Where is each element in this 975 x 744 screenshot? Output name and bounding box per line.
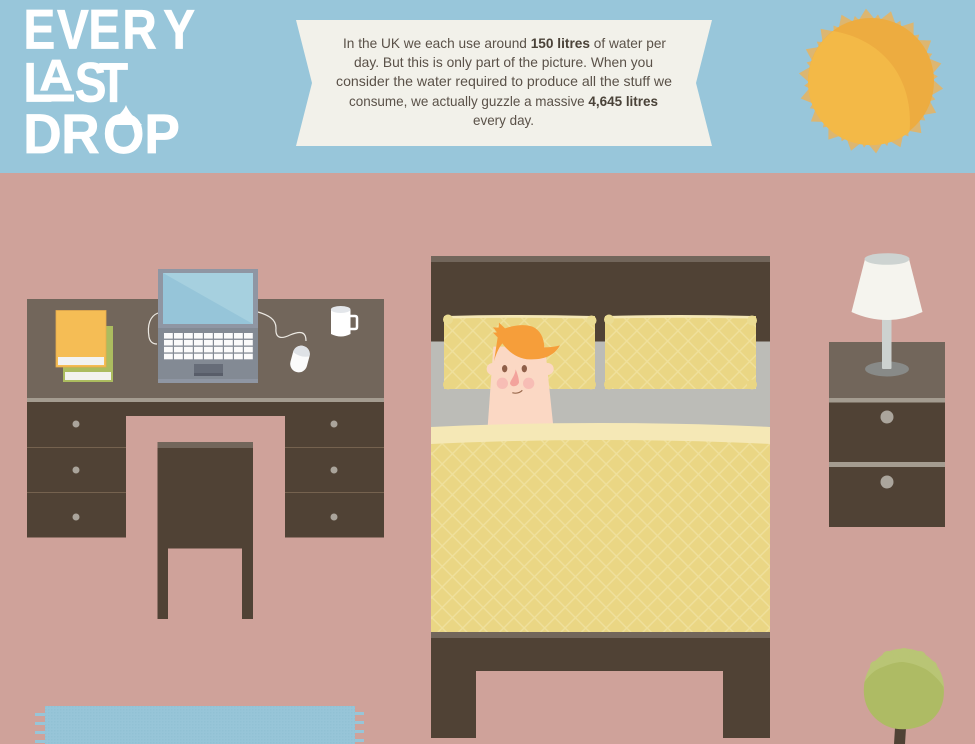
bottom drawer bbox=[829, 467, 945, 527]
sleeping person bbox=[487, 323, 560, 427]
intro paragraph bbox=[336, 35, 672, 128]
trunk bbox=[894, 728, 906, 744]
intro paragraph: consume, we actually guzzle a massive 4,645 litres bbox=[349, 93, 658, 109]
wall background bbox=[0, 173, 975, 744]
eyes bbox=[502, 365, 527, 372]
chair bbox=[158, 442, 253, 619]
orange book bbox=[56, 310, 106, 367]
laptop bbox=[158, 269, 258, 383]
nose bbox=[510, 369, 519, 386]
keyboard bbox=[164, 333, 253, 360]
footboard bbox=[431, 632, 770, 738]
blanket bbox=[431, 423, 770, 632]
books bbox=[56, 310, 113, 382]
bed bbox=[431, 256, 770, 738]
desk top bbox=[27, 299, 384, 398]
intro paragraph: consider the water required to produce all the stuff we bbox=[336, 73, 672, 89]
drawer knobs bbox=[72, 420, 338, 520]
left pillow bbox=[443, 314, 596, 390]
title line: EVERY: EVERY bbox=[23, 0, 195, 61]
laptop screen bbox=[163, 273, 253, 324]
green book bbox=[63, 326, 113, 382]
title line: DROP with water drop O: DROP bbox=[23, 103, 180, 165]
face bbox=[487, 347, 554, 427]
icon: sun bbox=[798, 8, 944, 154]
hair bbox=[493, 323, 560, 361]
header sky band bbox=[0, 0, 975, 173]
desk bbox=[27, 299, 384, 538]
nightstand bbox=[829, 342, 945, 527]
icon: mouse bbox=[288, 344, 312, 374]
rug fringe bbox=[35, 712, 364, 743]
headboard bbox=[431, 256, 770, 342]
mouth bbox=[512, 390, 522, 393]
sun rays bbox=[798, 8, 944, 154]
banner: intro text bbox=[296, 20, 712, 146]
right pillow bbox=[604, 314, 757, 390]
drawer lines bbox=[27, 448, 384, 492]
blanket fold bbox=[431, 423, 770, 444]
foliage front bbox=[864, 662, 944, 729]
icon: mug bbox=[331, 306, 357, 336]
trackpad bbox=[194, 364, 223, 376]
intro paragraph: In the UK we each use around 150 litres of water per bbox=[343, 35, 666, 51]
plant bbox=[864, 648, 944, 744]
sun highlight bbox=[808, 31, 910, 145]
title line: LAST: ST bbox=[75, 52, 128, 114]
sun disc bbox=[808, 18, 934, 144]
intro paragraph: day. But this is only part of the picture. When you bbox=[354, 54, 653, 70]
intro paragraph: every day. bbox=[473, 112, 534, 128]
cheeks bbox=[497, 378, 534, 389]
nightstand knobs bbox=[880, 410, 894, 488]
desk frame and pedestals bbox=[27, 402, 384, 538]
title line: LAST: L bbox=[23, 52, 53, 114]
laptop cables bbox=[148, 312, 306, 344]
top drawer bbox=[829, 402, 945, 462]
title: Every Last Drop bbox=[23, 0, 195, 165]
title line: LAST bbox=[23, 50, 128, 114]
title line: LAST: A bbox=[40, 50, 73, 100]
lamp shade bbox=[852, 259, 922, 320]
foliage back bbox=[864, 648, 944, 728]
rug bbox=[35, 706, 364, 744]
mattress sheet bbox=[431, 340, 770, 435]
icon: lamp bbox=[852, 253, 922, 376]
